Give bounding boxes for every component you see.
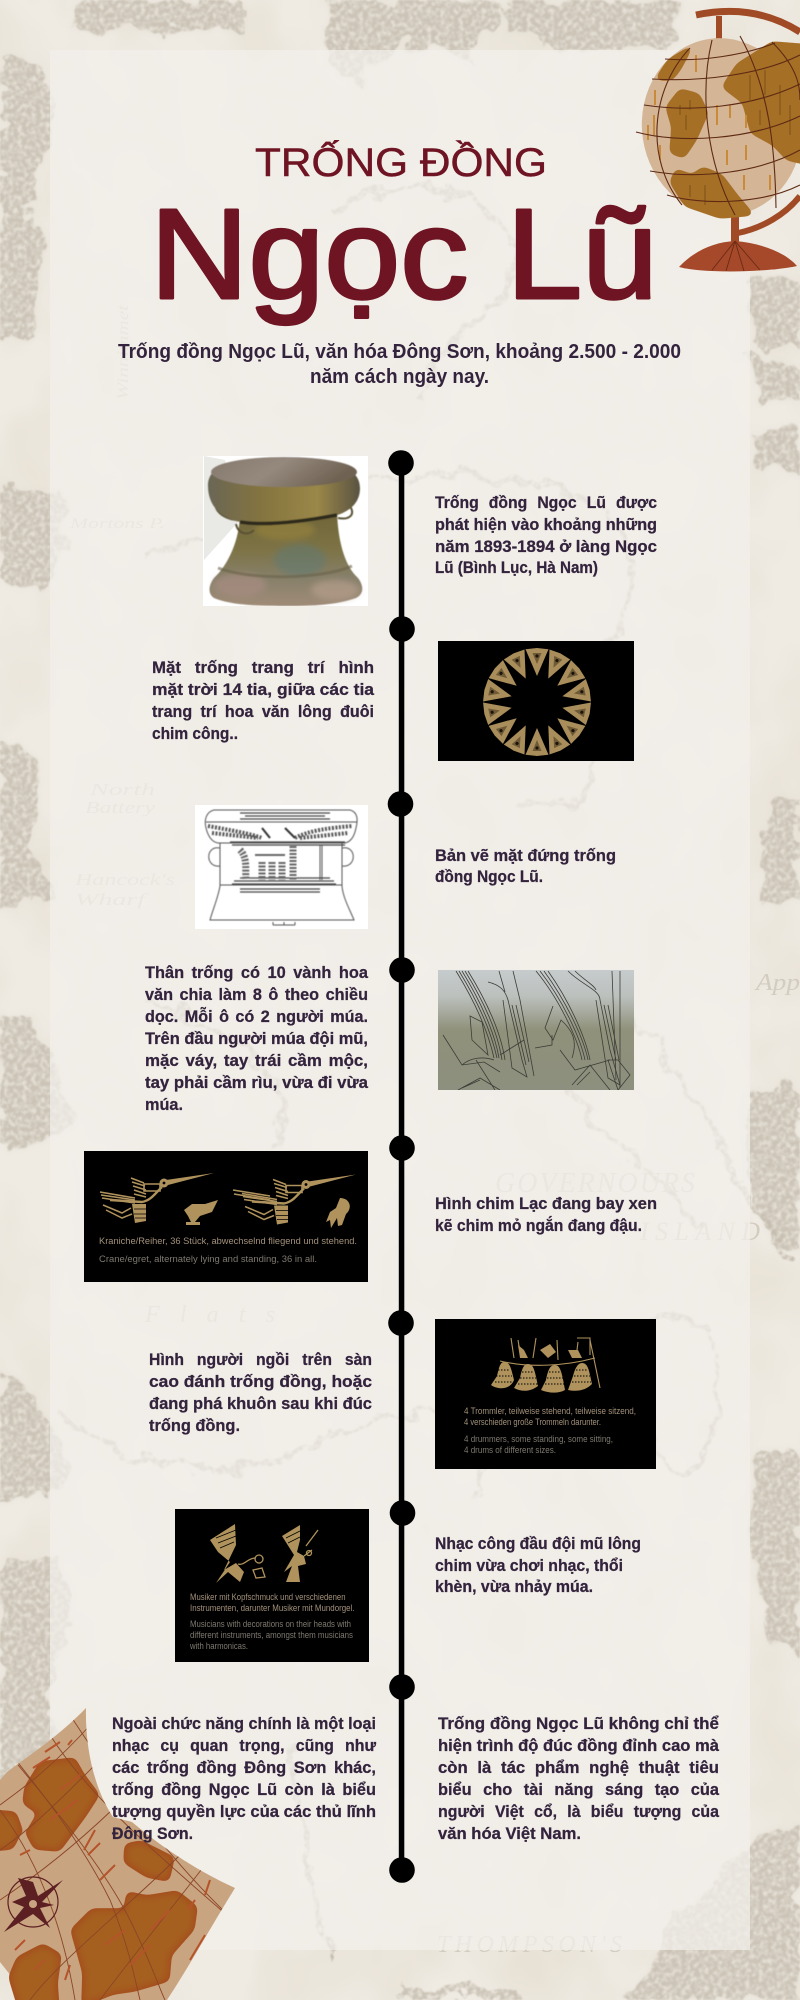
text: drum body: mặc váy, tay trái cầm mộc, [145, 1052, 368, 1070]
musician figures [210, 1524, 306, 1583]
image: drummers motif [435, 1319, 656, 1469]
image: musicians motif: Musicians with decorations on their heads with [190, 1619, 351, 1629]
text: drum face [152, 659, 375, 743]
image: drummers motif: 4 verschieden große Trommeln darunter. [464, 1417, 601, 1427]
timeline [388, 450, 415, 1883]
text: symbol of power: trống đồng Ngọc Lũ còn là biểu [112, 1781, 376, 1799]
text: artistic masterpiece: hiện trình độ đúc đồng đỉnh cao mà [438, 1737, 720, 1755]
image: bronze drum photo [203, 456, 368, 606]
background: antique map: ISLAND [639, 1217, 760, 1246]
text: artistic masterpiece [438, 1715, 720, 1843]
drummers figures [491, 1344, 592, 1393]
text: drum body: múa. [145, 1096, 183, 1114]
illustration: globe [630, 11, 800, 271]
image: crane and egret motif: Crane/egret, alternately lying and standing, 36 in all. [99, 1254, 317, 1264]
text: symbol of power: tượng quyền lực của các thủ lĩnh [112, 1803, 376, 1821]
subtitle: năm cách ngày nay. [310, 366, 489, 388]
image: musicians motif: different instruments, amongst them musicians [190, 1630, 353, 1640]
background: antique map: Battery [85, 798, 156, 817]
text: drum body: Thân trống có 10 vành hoa [145, 964, 369, 982]
background: antique map: Winnimmet [115, 304, 132, 400]
text: drawing caption: đồng Ngọc Lũ. [435, 868, 543, 886]
text: drum face: chim công.. [152, 725, 238, 743]
crane caption: Kraniche/Reiher, 36 Stück, abwechselnd fliegend und stehend. [99, 1236, 357, 1246]
text: seated drummers: đang phá khuôn sau khi đúc [149, 1395, 372, 1413]
text: drum face: trang trí hoa văn lông đuôi [152, 703, 374, 721]
map continents [0, 1759, 196, 2000]
text: discovery: năm 1893-1894 ở làng Ngọc [435, 538, 657, 556]
text: discovery: Lũ (Bình Lục, Hà Nam) [435, 559, 598, 577]
text: seated drummers: Hình người ngồi trên sàn [149, 1351, 372, 1369]
map marks [15, 1740, 210, 1980]
illustration: treasure map [0, 1700, 235, 2000]
background: antique map: Mortons P. [69, 516, 165, 532]
text: discovery: Trống đồng Ngọc Lũ được [435, 494, 657, 512]
text: musicians [435, 1535, 641, 1596]
globe sphere [630, 28, 800, 226]
text: drum face: mặt trời 14 tia, giữa các tia [152, 681, 375, 699]
text: discovery [435, 494, 657, 577]
text: drum body: tay phải cầm rìu, vừa đi vừa [145, 1074, 369, 1092]
text: drum body: văn chia làm 8 ô theo chiều [145, 986, 368, 1004]
background: antique map: Wharf [75, 890, 149, 909]
background: antique map: Hancock's [74, 870, 176, 889]
image: crane and egret motif [84, 1151, 368, 1282]
background: antique map: THOMPSON'S [437, 1932, 622, 1958]
text: seated drummers: cao đánh trống đồng, hoặc [149, 1373, 372, 1391]
text: Lac birds: kẽ chim mỏ ngắn đang đậu. [435, 1216, 642, 1235]
image: drummers motif: 4 drummers, some standing, some sitting, [464, 1434, 613, 1444]
map sheet [0, 1708, 235, 2000]
crane figures [100, 1173, 356, 1228]
image: 14-ray sun pattern [438, 641, 634, 761]
map grid [0, 1700, 228, 2000]
image: musicians motif [175, 1509, 369, 1662]
text: drum body: Trên đầu người múa đội mũ, [145, 1030, 368, 1048]
text: drawing caption [435, 847, 616, 886]
text: symbol of power: Đông Sơn. [112, 1825, 193, 1843]
text: drum face: Mặt trống trang trí hình [152, 659, 374, 677]
image: musicians motif: Instrumenten, darunter Musiker mit Mundorgel. [190, 1603, 354, 1613]
background: antique map: App [754, 970, 800, 996]
globe base [679, 241, 797, 271]
musicians caption: Musiker mit Kopfschmuck und verschiedenen [190, 1592, 346, 1602]
image: drummers motif: 4 drums of different sizes. [464, 1445, 556, 1455]
subtitle: Trống đồng Ngọc Lũ, văn hóa Đông Sơn, khoảng 2.500 - 2.000 [118, 341, 681, 363]
title: Ngọc Lũ: Ngọc Lũ [150, 183, 658, 326]
image: etched dancers [438, 970, 634, 1090]
text: symbol of power: Ngoài chức năng chính là một loại [112, 1715, 376, 1733]
text: symbol of power: các trống đồng Đông Sơn khác, [112, 1759, 376, 1777]
text: musicians: khèn, vừa nhảy múa. [435, 1578, 593, 1596]
title: Trống đồng: TRỐNG ĐỒNG [255, 139, 547, 185]
drummers caption: 4 Trommler, teilweise stehend, teilweise sitzend, [464, 1406, 636, 1416]
text: musicians: chim vừa chơi nhạc, thổi [435, 1557, 623, 1575]
text: Lac birds: Hình chim Lạc đang bay xen [435, 1195, 657, 1213]
text: musicians: Nhạc công đầu đội mũ lông [435, 1535, 641, 1553]
background: antique map: North [88, 780, 155, 799]
text: artistic masterpiece: văn hóa Việt Nam. [438, 1825, 581, 1843]
globe arm [696, 11, 800, 32]
text: Lac birds [435, 1195, 657, 1235]
text: artistic masterpiece: người Việt cổ, là biểu tượng của [438, 1803, 720, 1821]
image: elevation drawing of drum [195, 805, 368, 929]
icon: compass [4, 1877, 63, 1932]
subtitle [118, 341, 681, 388]
text: symbol of power: nhạc cụ quan trọng, cũng như [112, 1737, 376, 1755]
text: artistic masterpiece: còn là tác phẩm nghệ thuật tiêu [438, 1759, 719, 1777]
text: drawing caption: Bản vẽ mặt đứng trống [435, 847, 616, 865]
background: antique map: GOVERNOURS [495, 1168, 695, 1199]
text: drum body [145, 964, 369, 1114]
text: artistic masterpiece: biểu cho tài năng sáng tạo của [438, 1781, 720, 1799]
text: drum body: dọc. Mỗi ô có 2 người múa. [145, 1007, 368, 1026]
text: symbol of power [112, 1715, 376, 1843]
text: seated drummers: trống đồng. [149, 1417, 240, 1435]
background: antique map: F l a t s [144, 1302, 275, 1328]
image: musicians motif: with harmonicas. [189, 1641, 248, 1651]
text: discovery: phát hiện vào khoảng những [435, 516, 657, 534]
text: artistic masterpiece: Trống đồng Ngọc Lũ không chỉ thể [438, 1715, 719, 1733]
text: seated drummers [149, 1351, 372, 1435]
